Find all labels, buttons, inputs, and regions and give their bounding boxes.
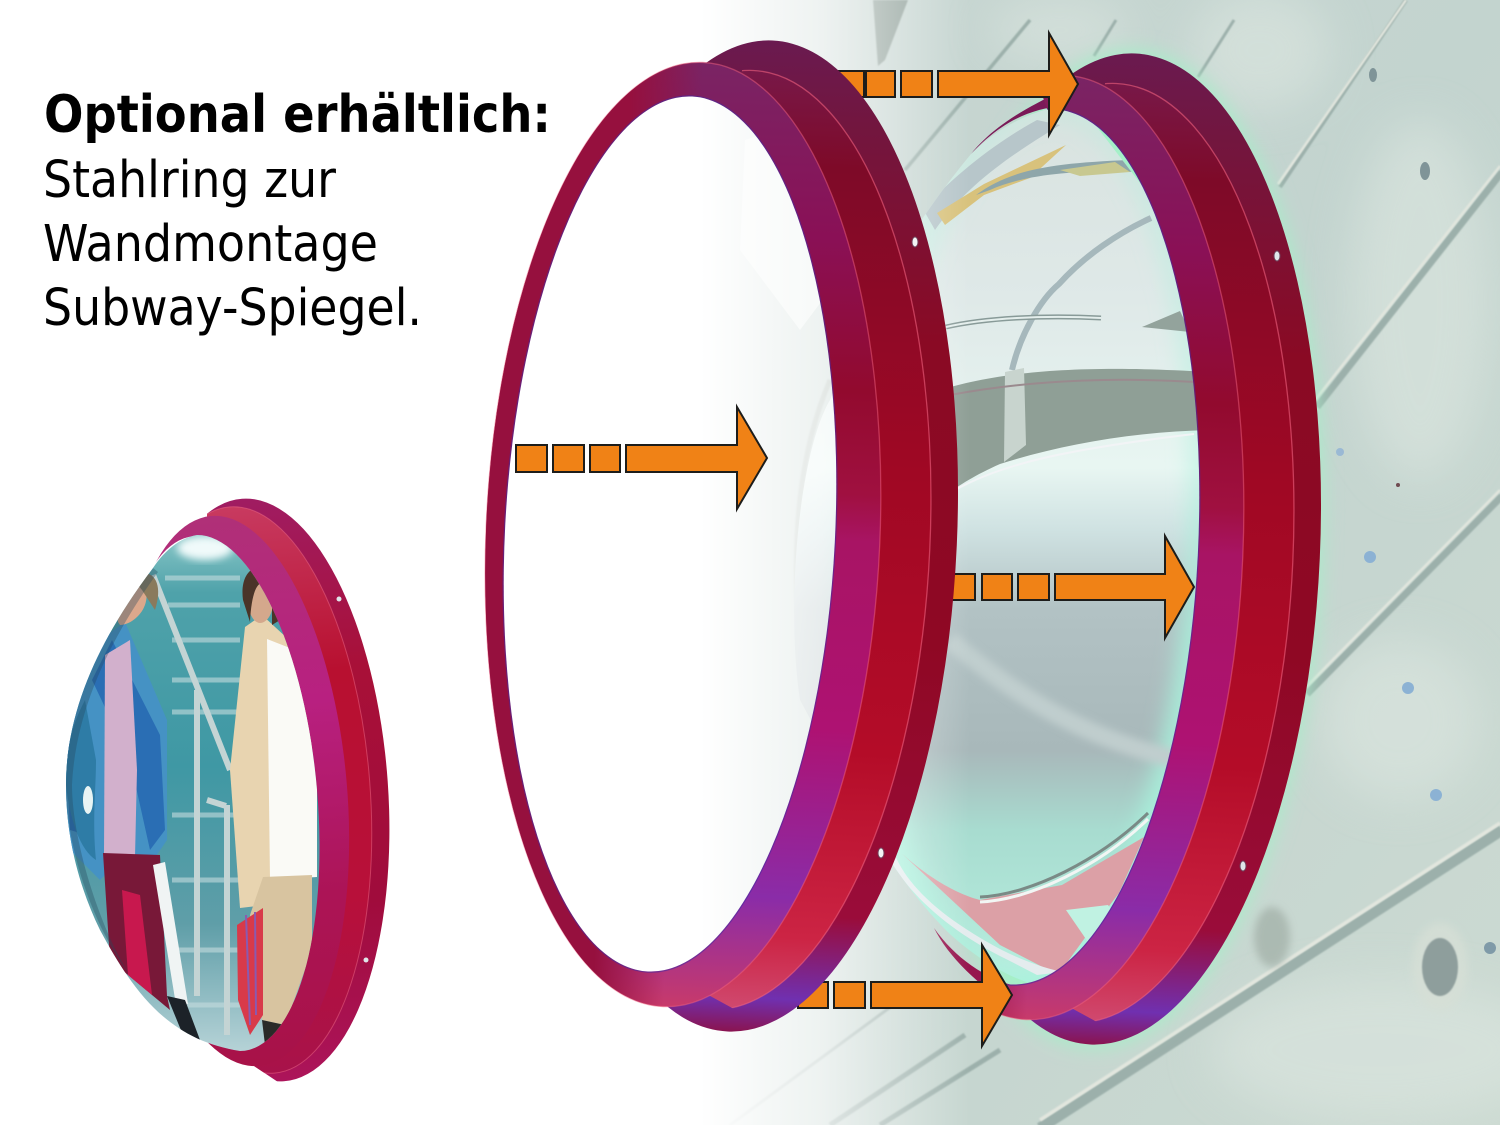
arrow: top <box>835 33 1078 135</box>
heading: Optional erhältlich: <box>44 85 551 145</box>
steel ring: wall mounted <box>1001 53 1321 1045</box>
screw holes <box>1240 251 1280 871</box>
plank joints, light edge <box>1040 0 1500 1120</box>
reflection: pink floor <box>898 837 1144 975</box>
description line 1: Stahlring zur <box>43 151 336 210</box>
small ring screw holes <box>336 596 368 962</box>
plank joints, dark <box>730 0 1500 1125</box>
wood plank wall <box>640 0 1500 1125</box>
far rim slivers of the wall ring <box>934 92 1065 1018</box>
arrow: middle right <box>945 536 1194 638</box>
description line 2: Wandmontage <box>43 215 378 274</box>
small complete mirror with ring <box>60 490 409 1090</box>
green glow behind wall ring <box>884 42 1342 1056</box>
handrail <box>153 575 230 1035</box>
arrow: middle left <box>516 407 767 509</box>
wood knots <box>1412 923 1468 1011</box>
stairs <box>165 578 240 1005</box>
woman right <box>230 567 317 1045</box>
text block <box>43 85 551 338</box>
highlight top <box>177 536 233 560</box>
convex mirror dome on the wall <box>796 109 1200 982</box>
description line 3: Subway-Spiegel. <box>43 279 422 338</box>
arrow: bottom <box>798 945 1012 1046</box>
dome left reflection <box>66 700 96 860</box>
wall dots <box>1336 68 1496 954</box>
white fade over the photo <box>700 0 970 1125</box>
steel ring: front <box>466 31 979 1041</box>
aqua edge next to the ring <box>896 110 1200 982</box>
reflection: dark band <box>953 368 1198 486</box>
reflection: top streaks <box>923 120 1135 230</box>
mirror reflection <box>60 530 320 1055</box>
screw holes <box>878 237 918 858</box>
small ring <box>156 498 390 1082</box>
reflection: arc and horizontal seam <box>946 218 1151 370</box>
woman left <box>60 573 200 1040</box>
